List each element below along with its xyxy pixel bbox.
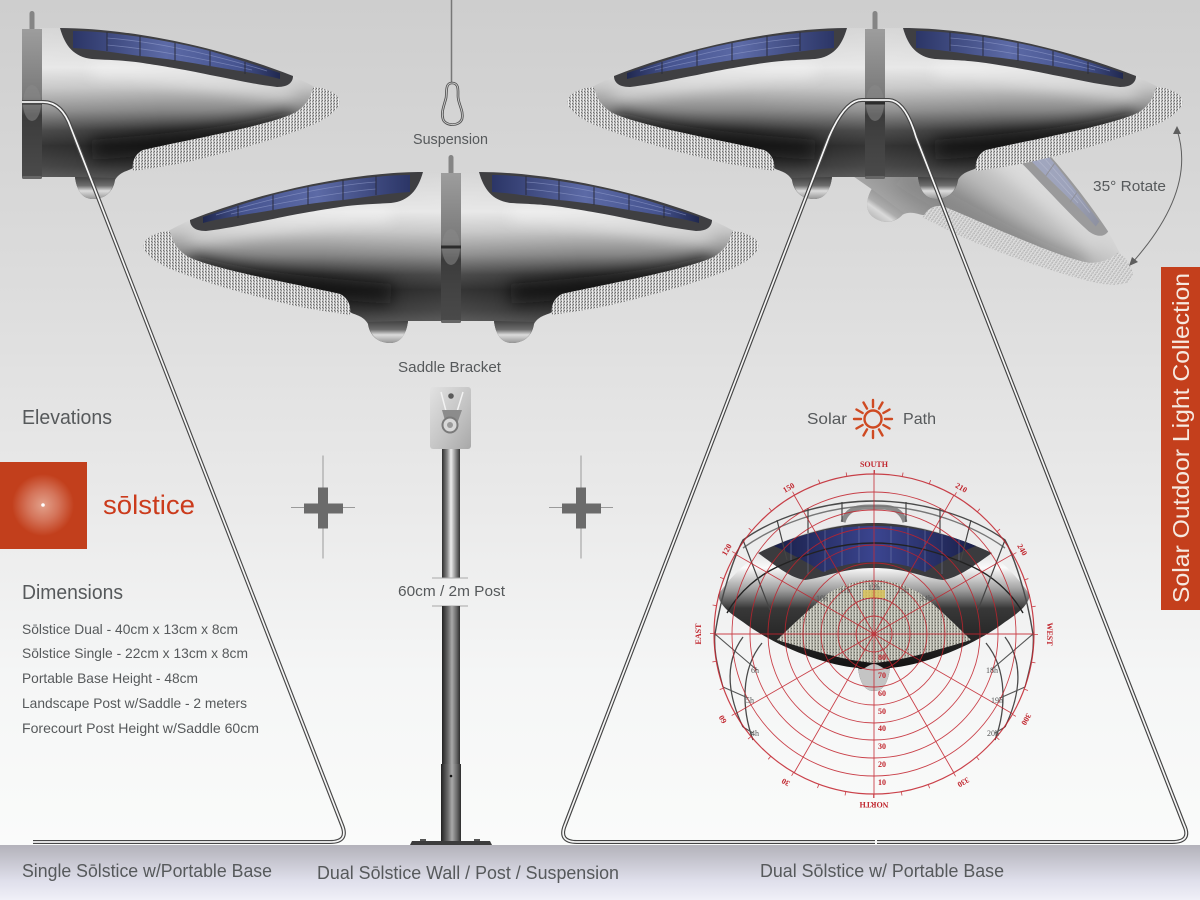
compass and azimuth labels: 240 <box>1015 542 1029 557</box>
hour labels: 20h <box>987 729 999 738</box>
compass and azimuth labels <box>694 460 1054 809</box>
sun path curves <box>715 501 1033 740</box>
ground band <box>0 845 1200 900</box>
plus sign, left <box>291 456 355 558</box>
altitude labels <box>878 653 886 787</box>
label: solar: Solar <box>807 411 848 428</box>
dimensions list: Sōlstice Dual - 40cm x 13cm x 8cm <box>22 621 238 637</box>
caption: single solstice: Single Sōlstice w/Portable Base <box>22 861 272 881</box>
hour labels: 4h <box>751 729 759 738</box>
post, upper section <box>442 449 460 578</box>
hour labels: 14h <box>920 594 932 603</box>
label: path: Path <box>903 411 936 428</box>
altitude labels: 30 <box>878 742 886 751</box>
dual portable base tube <box>563 100 1186 842</box>
altitude labels: 20 <box>878 760 886 769</box>
rotated ghost lamp: 35 degree position <box>830 47 1174 359</box>
compass and azimuth labels: EAST <box>694 623 703 644</box>
post, lower section with base plate <box>410 606 492 845</box>
hour labels: 11h <box>839 586 851 595</box>
caption: dual portable base: Dual Sōlstice w/ Portable Base <box>760 861 1004 881</box>
compass and azimuth labels: 150 <box>781 481 796 495</box>
dimensions list: Landscape Post w/Saddle - 2 meters <box>22 695 247 711</box>
label: suspension: Suspension <box>413 131 488 148</box>
logo wordmark: sōlstice <box>103 490 195 520</box>
dual solstice lamp, centre <box>144 155 758 343</box>
hour labels <box>746 583 1003 738</box>
hour labels: 5h <box>746 696 754 705</box>
compass and azimuth labels: NORTH <box>859 800 889 809</box>
hour labels: 12h <box>868 583 880 592</box>
vertical title band <box>1161 267 1200 610</box>
vertical title band: Solar Outdoor Light Collection <box>1168 273 1194 603</box>
hour labels: 19h <box>991 696 1003 705</box>
altitude labels: 50 <box>878 707 886 716</box>
altitude labels: 40 <box>878 724 886 733</box>
compass and azimuth labels: 60 <box>717 714 729 725</box>
logo mark: red square with glow <box>0 462 87 549</box>
hour labels: 18h <box>986 666 998 675</box>
compass and azimuth labels: 120 <box>720 542 734 557</box>
compass and azimuth labels: 210 <box>954 481 969 495</box>
compass and azimuth labels: 30 <box>780 776 791 788</box>
altitude labels: 70 <box>878 671 886 680</box>
compass and azimuth labels: SOUTH <box>860 460 889 469</box>
dimensions list: Sōlstice Single - 22cm x 13cm x 8cm <box>22 645 248 661</box>
lamp seen from below <box>718 507 1030 691</box>
label: 35 degree rotate: 35° Rotate <box>1093 178 1166 195</box>
dimensions list: Forecourt Post Height w/Saddle 60cm <box>22 720 259 736</box>
hour labels: 6h <box>751 666 759 675</box>
hour labels: 13h <box>897 586 909 595</box>
saddle bracket plate <box>430 387 471 449</box>
single solstice lamp <box>22 11 339 199</box>
altitude labels: 80 <box>878 653 886 662</box>
compass and azimuth labels: WEST <box>1045 622 1054 646</box>
polar grid <box>712 470 1036 798</box>
compass and azimuth labels: 300 <box>1019 712 1033 727</box>
plus sign, right <box>549 456 613 558</box>
heading: elevations: Elevations <box>22 407 112 429</box>
post gap tick marks <box>432 578 468 606</box>
dimensions list: Portable Base Height - 48cm <box>22 670 198 686</box>
hour labels: 10h <box>816 594 828 603</box>
compass and azimuth labels: 330 <box>956 775 971 789</box>
suspension cable and carabiner <box>442 0 462 125</box>
heading: dimensions: Dimensions <box>22 582 123 604</box>
altitude labels: 60 <box>878 689 886 698</box>
dimensions list <box>22 621 259 736</box>
altitude labels: 10 <box>878 778 886 787</box>
dual solstice lamp, top right <box>568 11 1182 199</box>
solar path diagram <box>694 460 1054 809</box>
single portable base tube <box>22 102 344 842</box>
label: 60cm / 2m post: 60cm / 2m Post <box>398 583 506 600</box>
label: saddle bracket: Saddle Bracket <box>398 359 502 376</box>
arrow: 35 degree rotation arc <box>1129 126 1182 266</box>
caption: dual wall post suspension: Dual Sōlstice Wall / Post / Suspension <box>317 863 619 883</box>
icon: sun <box>854 400 892 438</box>
